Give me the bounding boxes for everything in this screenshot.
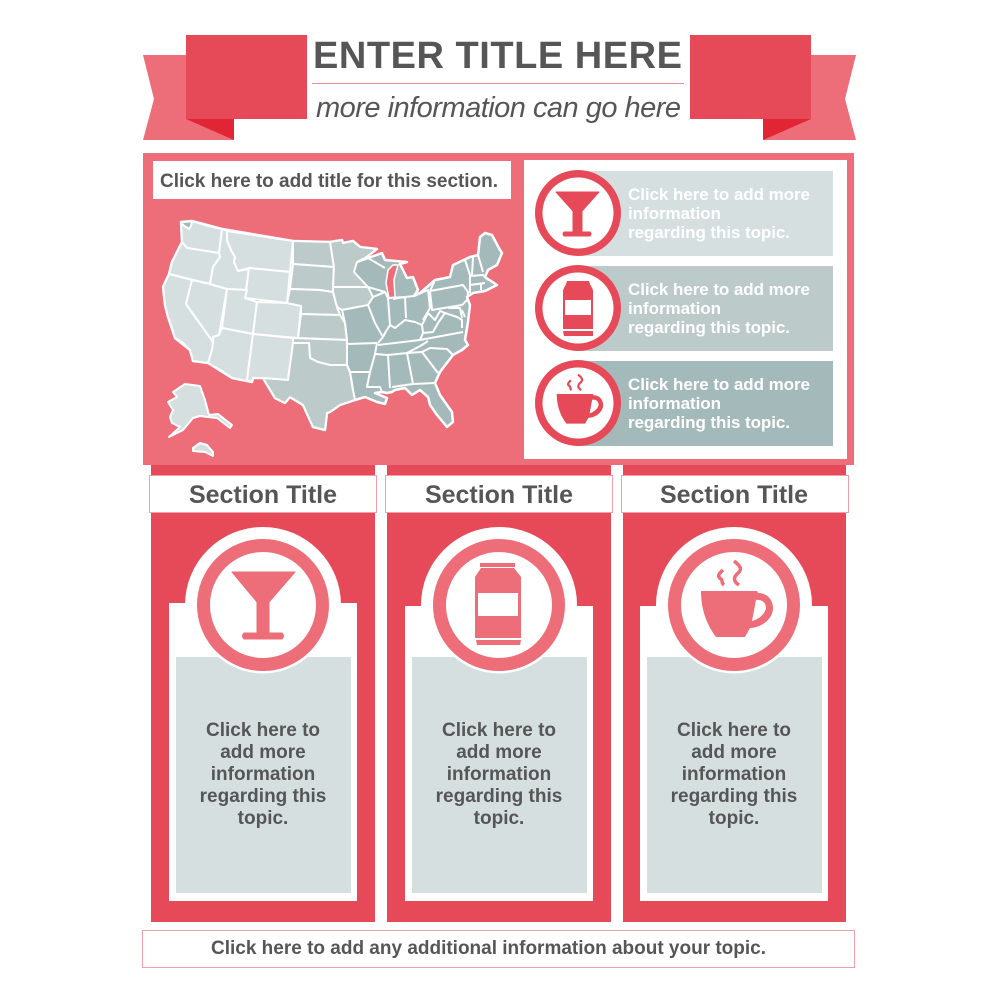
body text: add more: [220, 742, 306, 763]
white card: [169, 527, 357, 901]
section title: [386, 476, 612, 512]
section title: [150, 476, 376, 512]
body text: add more: [456, 742, 542, 763]
panel: column 1: [150, 465, 376, 922]
body text: Click here to: [677, 720, 791, 741]
body text: add more: [691, 742, 777, 763]
topic row: drink: information: [628, 204, 721, 223]
topic row: drink: [535, 170, 833, 256]
topic row: coffee: [535, 360, 833, 446]
body text: information: [447, 764, 551, 785]
body text: information: [682, 764, 786, 785]
topic row: can: [535, 265, 833, 351]
title: ENTER TITLE HERE: [313, 35, 682, 77]
icon: can: [440, 546, 558, 664]
right ribbon: [690, 35, 856, 140]
body text: information: [211, 764, 315, 785]
body text: topic.: [474, 808, 524, 829]
white card: [405, 527, 593, 901]
white card: [640, 527, 828, 901]
left ribbon: [143, 35, 307, 140]
panel: column 2: [386, 465, 612, 922]
body text: regarding this: [436, 786, 562, 807]
section title: Section Title: [189, 481, 337, 509]
footer note: [142, 930, 854, 968]
topic row: can: Click here to add more: [628, 280, 810, 299]
body text: regarding this: [671, 786, 797, 807]
topic row: coffee: Click here to add more: [628, 375, 810, 394]
section title box: [153, 161, 511, 199]
topic row: can: regarding this topic.: [628, 318, 790, 337]
topic row: drink: regarding this topic.: [628, 223, 790, 242]
topic row: coffee: information: [628, 394, 721, 413]
topic row: can: information: [628, 299, 721, 318]
icon: coffee cup: [674, 546, 794, 664]
panel: column 3: [622, 465, 848, 922]
section title: Section Title: [660, 481, 808, 509]
section title box: Click here to add title for this section.: [160, 171, 498, 192]
body text: Click here to: [206, 720, 320, 741]
US map: [163, 221, 502, 456]
footer note: Click here to add any additional information about your topic.: [211, 938, 766, 959]
topic row: coffee: regarding this topic.: [628, 413, 790, 432]
subtitle: more information can go here: [316, 92, 681, 124]
body text: topic.: [709, 808, 759, 829]
panel: map section: [143, 153, 854, 465]
topic row: drink: Click here to add more: [628, 185, 810, 204]
section title: Section Title: [425, 481, 573, 509]
body text: regarding this: [200, 786, 326, 807]
body text: topic.: [238, 808, 288, 829]
panel: topic list: [524, 160, 847, 459]
section title: [622, 476, 848, 512]
icon: martini: [204, 546, 322, 664]
body text: Click here to: [442, 720, 556, 741]
